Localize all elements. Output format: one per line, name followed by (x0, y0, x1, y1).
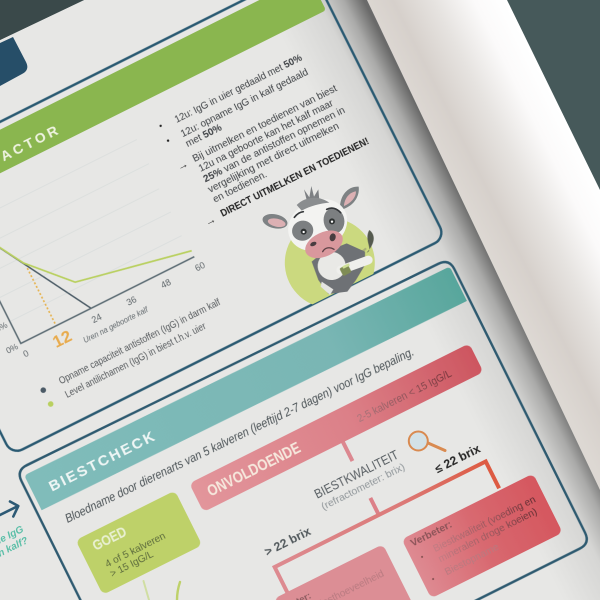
bullet text: 12u na geboorte kan het kalf maar (197, 97, 336, 175)
box: verbeter kwaliteit: mineralen droge koeien) (437, 507, 539, 565)
goed connector lines (144, 581, 180, 600)
bullet text: 12u: IgG in uier gedaald met 50% (173, 52, 305, 126)
brix quality label: (refractometer: brix) (319, 461, 407, 513)
line chart: 48 (159, 277, 173, 290)
top-left blue tab (0, 37, 27, 86)
bullet text: met 50% (184, 121, 224, 150)
bullet text: 25% van de antistoffen opnemen in (201, 104, 347, 185)
box: goed: 4 of 5 kalveren (103, 530, 168, 570)
icon: magnifier (409, 432, 445, 450)
rolled page (367, 0, 600, 490)
box: verbeter hoeveelheid (268, 544, 413, 600)
intro sentence: Bloedname door dierenarts van 5 kalveren (leeftijd 2-7 dagen) voor IgG bepaling. (63, 345, 416, 526)
line chart: 0 (21, 348, 30, 359)
dark top-left corner (0, 0, 84, 40)
shadow cast by roll (263, 0, 600, 600)
panel: time factor (0, 0, 445, 455)
bullet text: Bij uitmelken en toedienen van biest (191, 82, 339, 165)
chart legend: Level antilichamen (IgG) in biest t.h.v. uier (63, 320, 208, 401)
line chart: 24 (90, 312, 103, 325)
box: onvoldoende: ONVOLDOENDE (205, 439, 304, 500)
line chart: 12 (49, 326, 75, 352)
branch label: at most 22 brix: ≤ 22 brix (433, 443, 483, 476)
bullet text (156, 42, 372, 229)
brix quality label: BIESTKWALITEIT (312, 447, 401, 502)
bullet text: → (203, 213, 218, 229)
illustration: green circle behind cow (284, 221, 375, 304)
bullet text: vergelijking met direct uitmelken (206, 120, 341, 196)
branch label: more than 22 brix: > 22 brix (263, 526, 314, 559)
line chart: 60 (193, 260, 207, 273)
bullet text: en toedienen. (211, 168, 269, 205)
panel: biestcheck (15, 255, 591, 600)
heading band: biestcheck: BIESTCHECK (46, 428, 158, 495)
chart legend: Opname capaciteit antistoffen (IgG) in darm kalf (57, 296, 222, 387)
box: goed: > 15 IgG/L (108, 548, 156, 580)
arrow to biestcheck (0, 502, 18, 516)
box: goed (76, 491, 202, 595)
box: goed: GOED (90, 523, 130, 555)
box: verbeter kwaliteit (402, 474, 563, 598)
line chart: 0% (4, 341, 20, 356)
side question text (0, 524, 31, 561)
bullet text: → (175, 158, 191, 174)
line chart: Uren na geboorte kalf (81, 304, 151, 345)
box: verbeter kwaliteit: Biestkwaliteit (voeding en (432, 494, 538, 555)
box: verbeter kwaliteit: Verbeter: (409, 519, 454, 549)
box: onvoldoende: 2-5 kalveren < 15 IgG/L (355, 368, 454, 425)
illustration: cow (261, 186, 374, 295)
line chart (0, 114, 213, 380)
box: onvoldoende (189, 343, 483, 512)
box: verbeter kwaliteit: Biestopname (443, 542, 501, 578)
line chart: 36 (125, 294, 138, 308)
decision tree connectors (238, 389, 499, 594)
bullet text: 12u: opname IgG in kalf gedaald (179, 66, 310, 140)
bullet text: DIRECT UITMELKEN EN TOEDIENEN! (218, 135, 371, 220)
